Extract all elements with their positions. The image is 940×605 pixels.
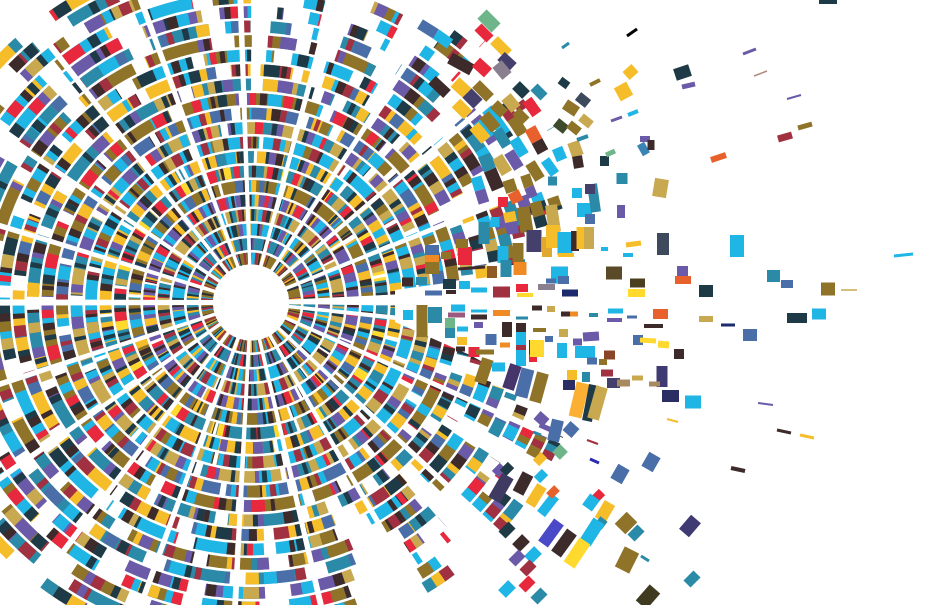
ring 10: [22, 74, 480, 531]
ring 2: [168, 220, 334, 385]
fragments: north east arcs: [420, 14, 596, 244]
fragments: south east scatter: [494, 415, 697, 605]
ring 1: [207, 258, 295, 346]
ring 19: [0, 0, 682, 605]
ring 17: [0, 0, 640, 605]
ring 6: [90, 141, 412, 464]
fragments: central east band: [402, 239, 578, 366]
ring 11: [0, 51, 502, 554]
ring 9: [46, 97, 456, 508]
ring 7: [91, 142, 411, 463]
fragments: tall east blocks above the axis: [534, 173, 663, 293]
fragments: lower east band: [480, 308, 669, 421]
circular genome rings: [0, 0, 722, 605]
ring 16: [0, 7, 546, 598]
ring 3: [172, 223, 330, 382]
ring 21: [0, 0, 722, 605]
ring 20: [0, 0, 581, 605]
east fade mask: [395, 100, 940, 440]
ring 4: [128, 180, 374, 425]
fragments: far east scatter: [632, 235, 913, 471]
ring 13: [0, 5, 549, 600]
ring 22: [0, 0, 639, 605]
ring 12: [0, 46, 507, 559]
ring 8: [54, 106, 448, 499]
ring 14: [0, 24, 530, 581]
radial spokes separating sectors: [0, 0, 669, 605]
scattered fragments: [402, 0, 913, 605]
fragments: upper right scatter: [556, 0, 837, 161]
east side ring breakup: [0, 0, 600, 605]
ring 18: [0, 0, 556, 605]
ring 5: [133, 184, 369, 421]
ring 15: [0, 0, 595, 605]
